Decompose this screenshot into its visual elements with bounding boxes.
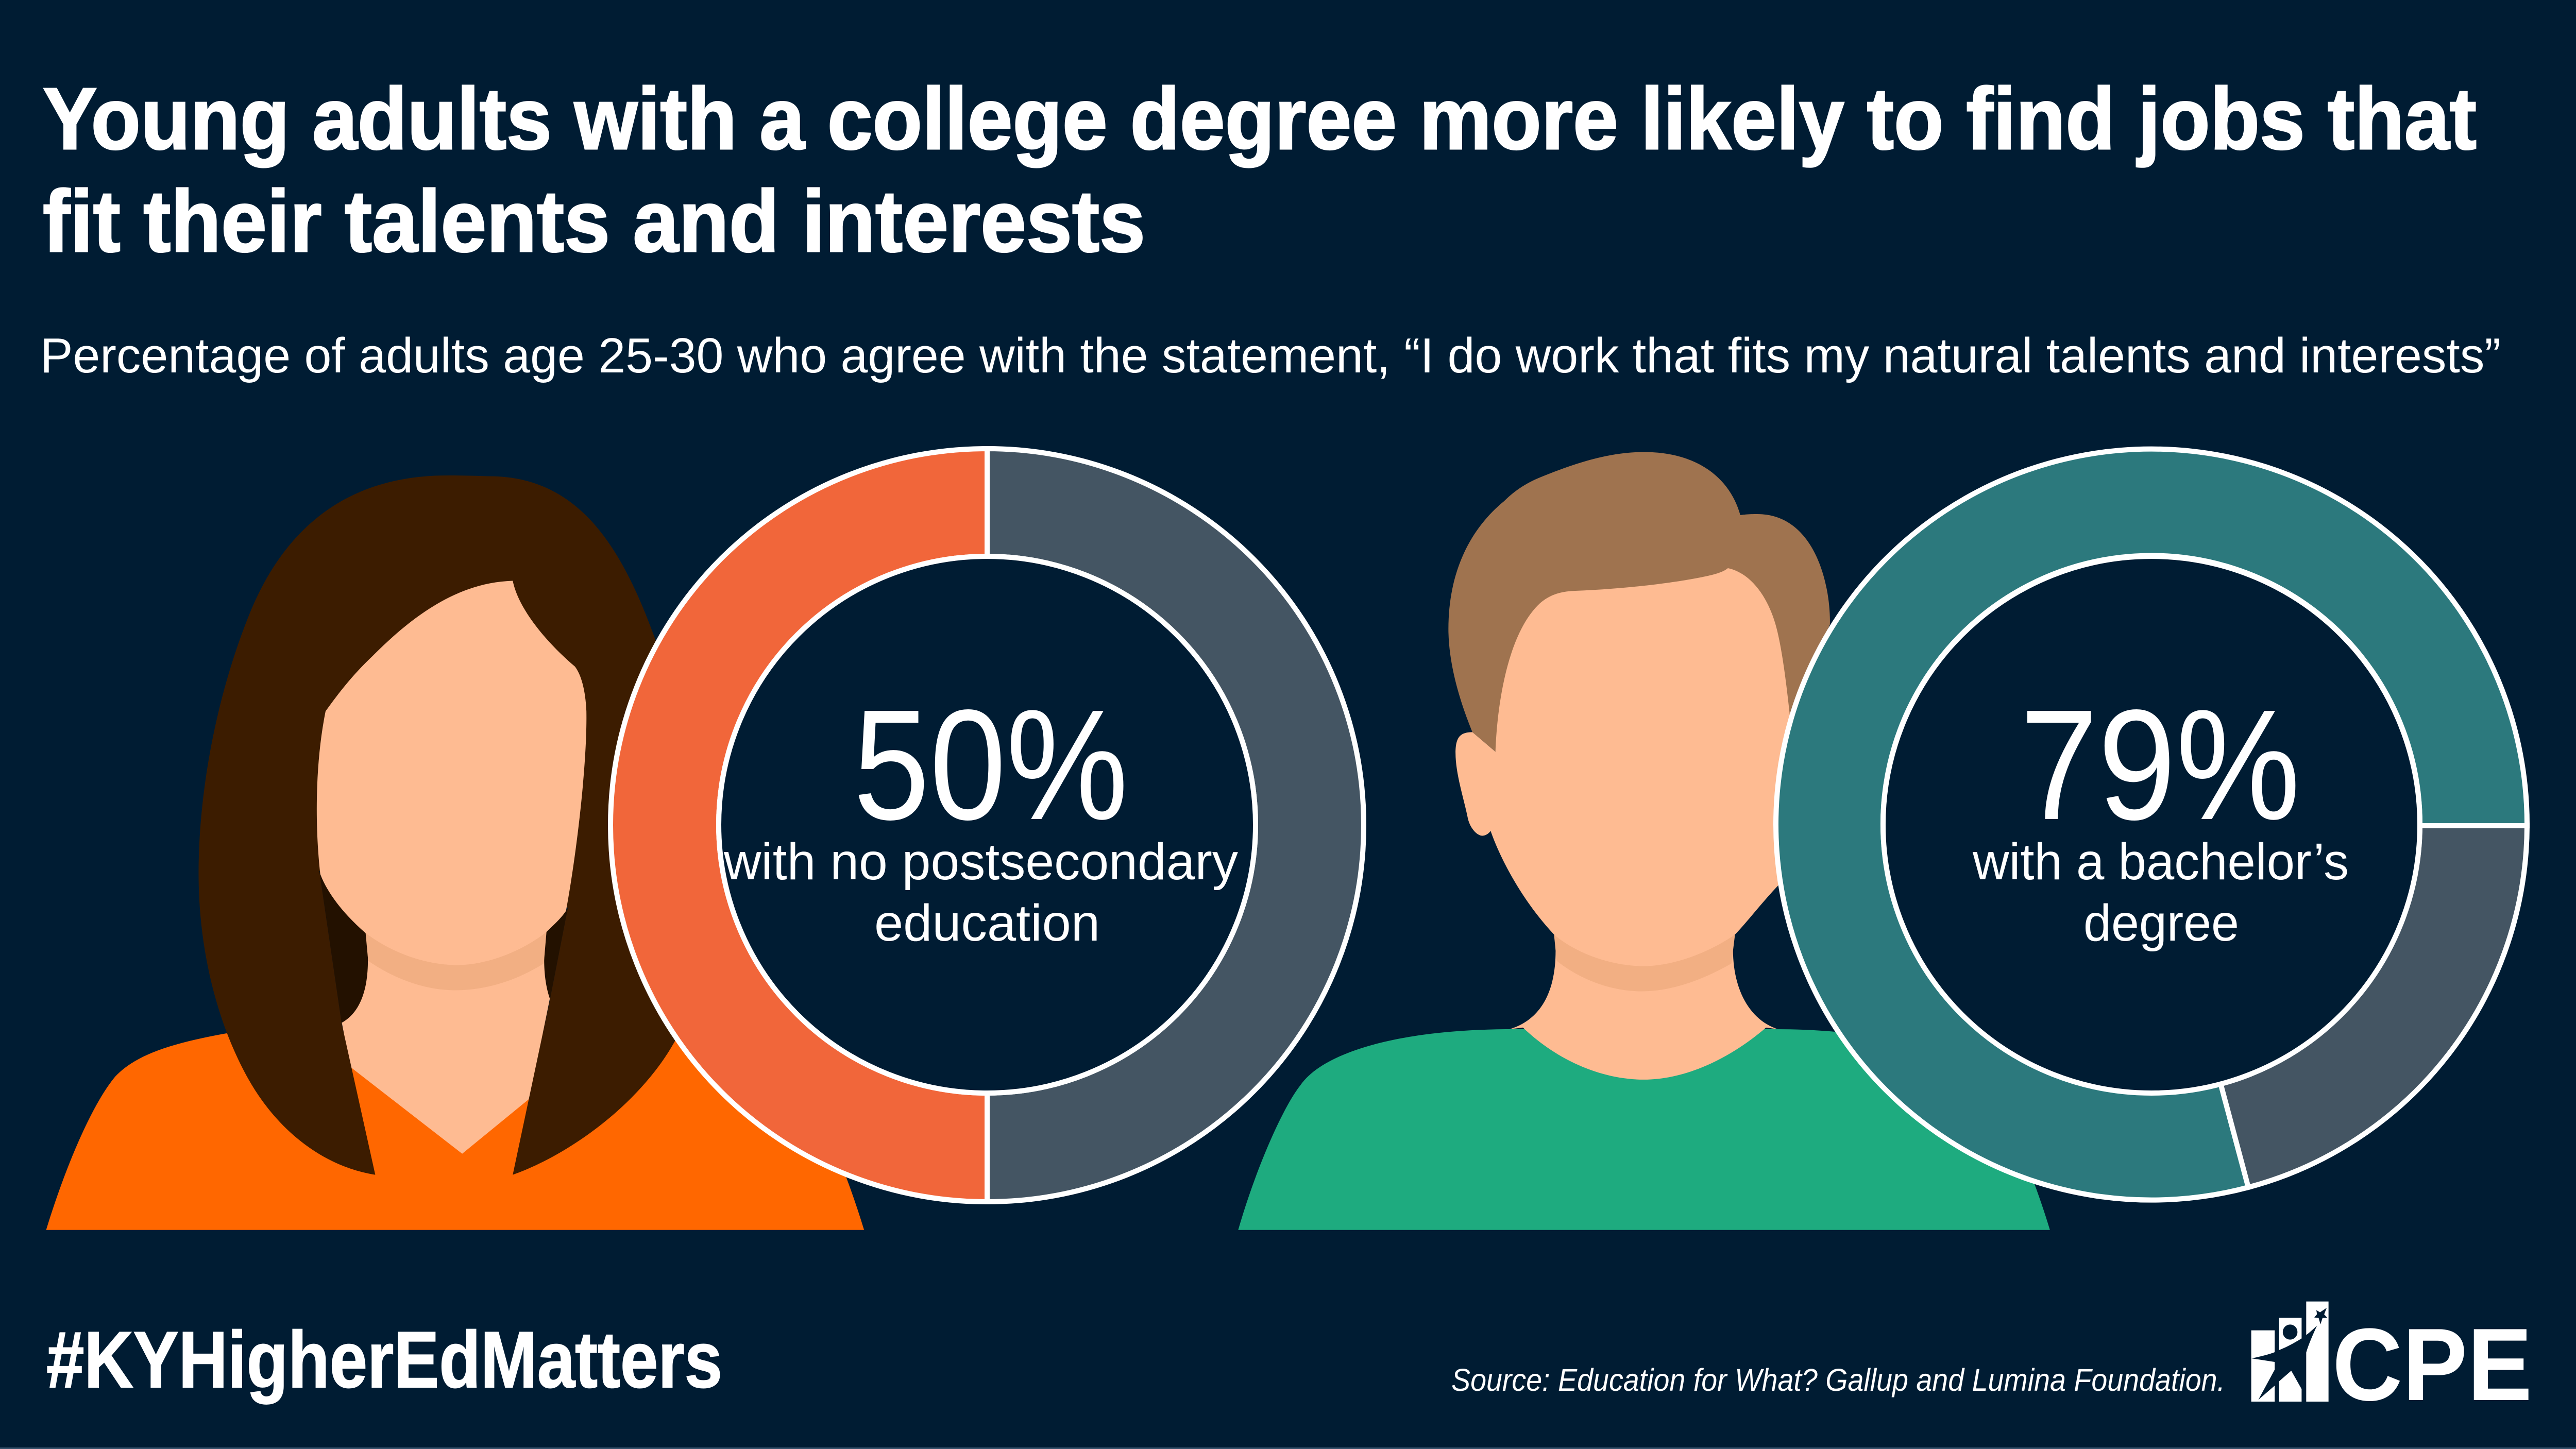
title: fit their talents and interests [43,173,1145,270]
woman: face [317,581,586,965]
donut 2: centre [1883,556,2420,1093]
donut 1: grey segment [987,449,1364,1202]
illustration: woman [46,475,864,1230]
stat label: bachelor's degree: with a bachelor’s [1972,833,2349,891]
stat: 79%: 79% [2020,677,2300,853]
stat: 50%: 50% [853,677,1128,853]
woman: orange top [46,1033,864,1230]
hashtag: #KYHigherEdMatters [46,1315,722,1404]
man: neck [1510,927,1777,1080]
donut 1: orange segment [611,449,987,1202]
subtitle: Percentage of adults age 25-30 who agree with the statement, “I do work that fits my natural talents and interests” [40,328,2501,383]
illustration: man [1238,452,2050,1230]
logo icon: bars with figure [2251,1302,2329,1402]
woman: hair [198,475,699,1175]
donut chart: 79% bachelor's [1776,449,2527,1200]
stat label: no postsecondary: with no postsecondary [723,833,1238,891]
logo wordmark: CPE [2332,1307,2532,1422]
donut chart: 50% no postsecondary [611,449,1364,1202]
stat label: no postsecondary [723,833,1238,952]
woman: neck shadow [365,932,547,990]
source note: Source: Education for What? Gallup and Lumina Foundation. [1451,1362,2225,1397]
stat label: no postsecondary: education [874,894,1100,952]
woman: shaded hair behind neck [319,872,568,1023]
logo: CPE [2251,1302,2532,1422]
woman: neck and chest [342,927,550,1154]
donut 1: centre [719,556,1256,1093]
man: hair [1448,452,1830,752]
man: ear [1455,732,1497,836]
stat label: bachelor's degree: degree [2083,894,2239,952]
donut 2: teal segment [1776,449,2527,1200]
title [43,70,2477,270]
man: neck shadow [1554,934,1735,991]
donut 2: grey segment [2221,826,2527,1187]
man: green shirt [1238,1029,2050,1230]
stat label: bachelor's degree [1972,833,2349,952]
man: face [1490,568,1806,966]
